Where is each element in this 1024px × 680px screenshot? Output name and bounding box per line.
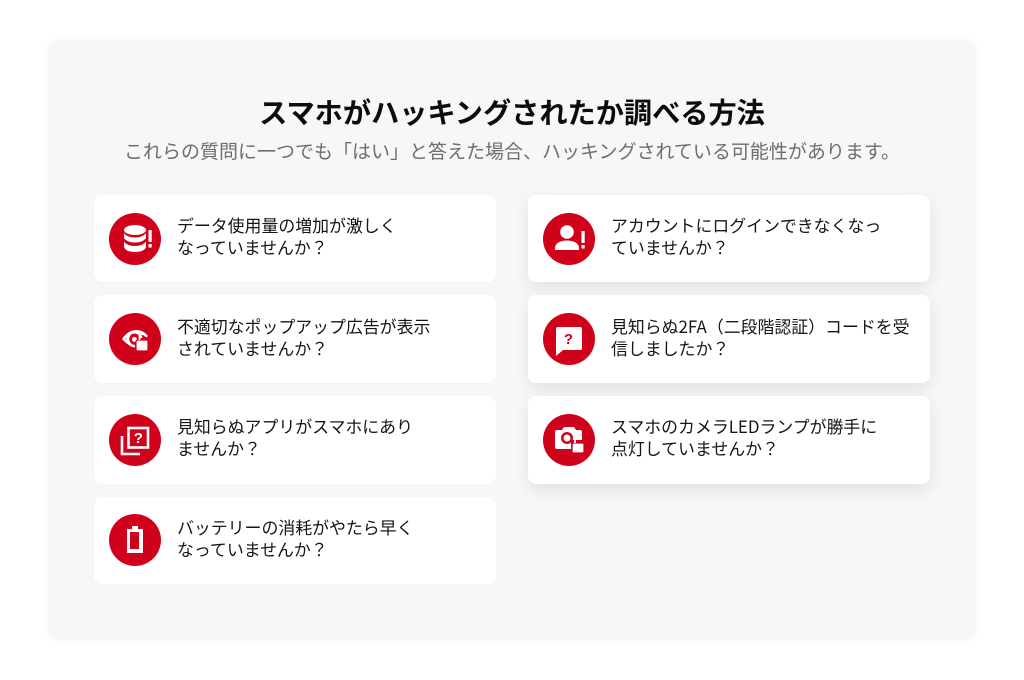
text — [611, 313, 910, 360]
card: account login — [528, 195, 930, 282]
icon: camera with open lock — [543, 414, 595, 466]
icon: battery — [109, 514, 161, 566]
card: unknown 2FA — [528, 295, 930, 383]
text: 見知らぬ2FA（二段階認証）コードを受 — [611, 313, 910, 338]
subtitle: これらの質問に一つでも「はい」と答えた場合、ハッキングされている可能性があります。 — [124, 137, 900, 164]
text: 信しましたか？ — [611, 335, 729, 360]
text: アカウントにログインできなくなっ — [611, 212, 881, 237]
background panel — [48, 40, 976, 640]
text: バッテリーの消耗がやたら早く — [177, 514, 413, 539]
text: されていませんか？ — [177, 335, 328, 360]
card: pop-up ads — [94, 295, 496, 383]
text: なっていませんか？ — [177, 536, 328, 561]
text: データ使用量の増加が激しく — [177, 212, 397, 237]
text — [177, 514, 413, 561]
icon: eye with open lock — [109, 313, 161, 365]
icon: speech bubble with question mark — [543, 313, 595, 365]
text: 点灯していませんか？ — [611, 435, 779, 460]
icon: database alert — [109, 213, 161, 265]
text: 不適切なポップアップ広告が表示 — [177, 313, 430, 338]
text — [611, 413, 877, 460]
text — [611, 212, 881, 259]
card: data usage — [94, 195, 496, 282]
icon: speech bubble with question mark: ? — [564, 331, 573, 348]
text — [177, 212, 397, 259]
icon: stacked squares with question mark — [109, 414, 161, 466]
title: スマホがハッキングされたか調べる方法 — [259, 91, 765, 132]
text: 見知らぬアプリがスマホにあり — [177, 413, 413, 438]
text — [177, 413, 413, 460]
card: camera LED — [528, 396, 930, 484]
text — [177, 313, 430, 360]
text: ませんか？ — [177, 435, 261, 460]
icon: stacked squares with question mark: ? — [134, 430, 143, 447]
icon: user alert — [543, 213, 595, 265]
card: battery — [94, 497, 496, 584]
text: ていませんか？ — [611, 234, 729, 259]
card: unknown apps — [94, 396, 496, 484]
text: スマホのカメラLEDランプが勝手に — [611, 413, 877, 438]
text: なっていませんか？ — [177, 234, 328, 259]
